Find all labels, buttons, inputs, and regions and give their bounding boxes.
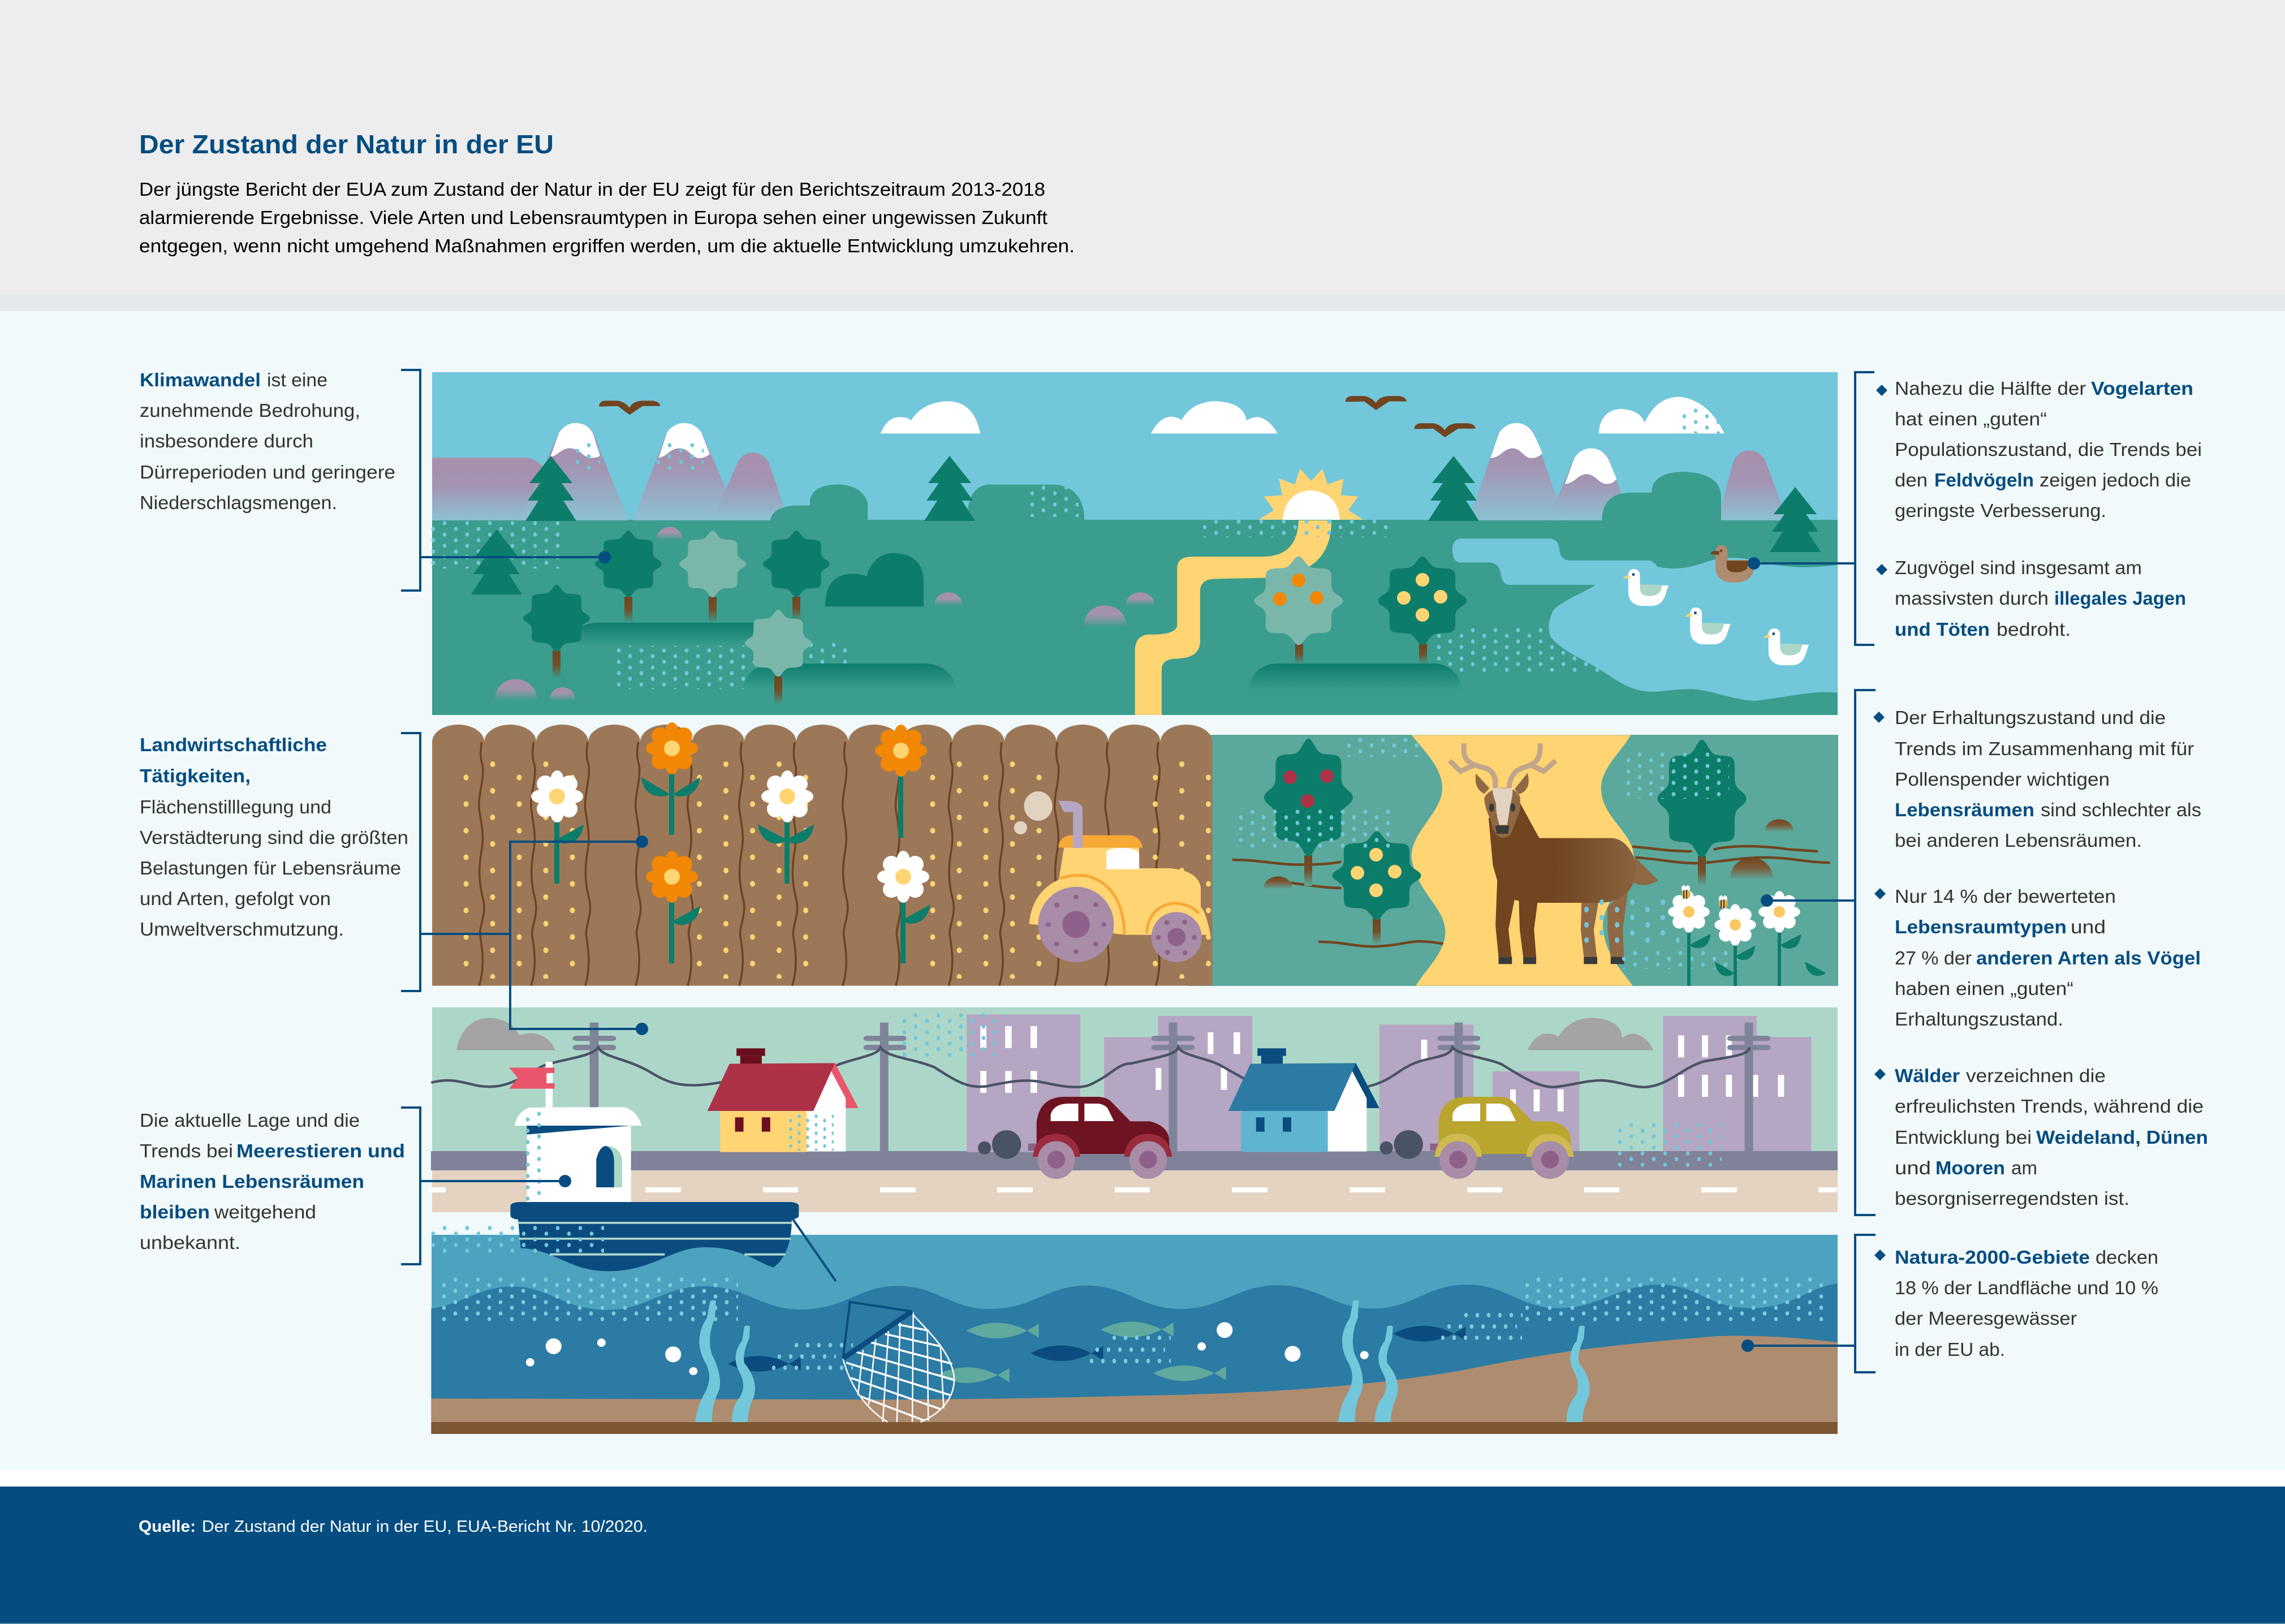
text: Vogelarten bullets: [1876, 378, 2202, 640]
text: Meerestiere: Marinen Lebensräumen: [140, 1171, 364, 1192]
text: Vogelarten bullets: Zugvögel sind insgesamt am: [1895, 557, 2142, 578]
text: Lebensräume bullets: Wälder: [1895, 1065, 1960, 1086]
trees forest: [523, 531, 830, 705]
text: Vogelarten bullets: Feldvögeln: [1934, 469, 2034, 490]
fish trail dots: [771, 1312, 1523, 1371]
text: Klimawandel: Niederschlagsmengen.: [140, 492, 337, 513]
text: Vogelarten bullets: den: [1895, 469, 1928, 490]
connector: right 3: [1741, 1235, 1876, 1372]
text: Lebensräume bullets: sind schlechter als: [2041, 799, 2201, 820]
text: Lebensräume bullets: Entwicklung bei: [1895, 1127, 2032, 1148]
text: Landwirtschaftliche Tätigkeiten: Landwirtschaftliche: [140, 734, 327, 755]
text: Vogelarten bullets: Populationszustand, die Trends bei: [1895, 439, 2202, 460]
text: Meerestiere: [140, 1110, 405, 1253]
icon: daisies and bees: [1668, 885, 1826, 986]
seagrass: [695, 1300, 1590, 1422]
text: Klimawandel: insbesondere durch: [140, 430, 313, 451]
dark water, seabed, dots: [431, 1283, 1838, 1434]
text: Lebensräume bullets: am: [2011, 1157, 2037, 1178]
swans and duck: [1623, 545, 1809, 665]
icon: deer: [1450, 743, 1658, 964]
meadow trees: [1264, 739, 1746, 945]
panel: farmland and meadow: [432, 722, 1838, 986]
footer band: [0, 1487, 2285, 1624]
text: Vogelarten bullets: zeigen jedoch die: [2040, 469, 2191, 490]
water dots: [442, 1277, 1823, 1321]
text: Lebensräume bullets: haben einen „guten“: [1895, 978, 2073, 999]
fruit trees: [1248, 557, 1467, 690]
intro text: Der jüngste Bericht der EUA zum Zustand der Natur in der EU zeigt für den Berichtszeitraum 2013-2018: [139, 179, 1045, 200]
intro text: alarmierende Ergebnisse. Viele Arten und Lebensraumtypen in Europa sehen einer ungewissen Zukunft: [139, 207, 1047, 228]
text: Lebensräume bullets: und: [1895, 1157, 1931, 1178]
text: Natura 2000: Natura-2000-Gebiete: [1895, 1247, 2090, 1268]
text: Vogelarten bullets: massivsten durch: [1895, 588, 2049, 609]
text: Klimawandel: Dürreperioden und geringere: [140, 462, 395, 483]
buildings: [967, 1014, 1811, 1152]
text: Vogelarten bullets: bedroht.: [1997, 619, 2071, 640]
text: Natura 2000: [1874, 1247, 2158, 1360]
text: Landwirtschaftliche Tätigkeiten: und Arten, gefolgt von: [140, 888, 331, 909]
text: Vogelarten bullets: und Töten: [1895, 619, 1990, 640]
text: Klimawandel: Klimawandel: [140, 369, 261, 390]
text: Lebensräume bullets: [1873, 707, 2208, 1209]
text: Lebensräume bullets: Trends im Zusammenhang mit für: [1895, 738, 2194, 759]
text: Vogelarten bullets: Vogelarten: [2091, 378, 2193, 399]
text: Lebensräume bullets: erfreulichsten Trends, während die: [1895, 1096, 2204, 1117]
text: Meerestiere: weitgehend: [214, 1201, 316, 1222]
cloud and path dots: [1202, 408, 1724, 537]
bubbles: [526, 1322, 1369, 1375]
text: Lebensräume bullets: Der Erhaltungszustand und die: [1895, 707, 2166, 728]
red car: [978, 1097, 1172, 1179]
text: Lebensräume bullets: Erhaltungszustand.: [1895, 1009, 2063, 1029]
text: Meerestiere: unbekannt.: [140, 1232, 240, 1253]
text: Landwirtschaftliche Tätigkeiten: Tätigkeiten,: [140, 765, 251, 786]
text: Landwirtschaftliche Tätigkeiten: [140, 734, 408, 940]
intro text: entgegen, wenn nicht umgehend Maßnahmen ergriffen werden, um die aktuelle Entwicklung umzukehren.: [139, 235, 1075, 256]
text: Natura 2000: decken: [2096, 1247, 2158, 1268]
source text: Quelle:: [139, 1518, 196, 1536]
text: Natura 2000: 18 % der Landfläche und 10 %: [1895, 1277, 2158, 1298]
flower stems and leaves: [531, 722, 930, 963]
utility poles and wires: [431, 1023, 1770, 1152]
road dashes: [428, 1187, 1837, 1192]
panel: town and road: [428, 1007, 1838, 1212]
furrows: [479, 742, 1161, 986]
farmland field: [432, 725, 1213, 986]
meadow path, lines and mounds: [1232, 735, 1830, 986]
text: Lebensräume bullets: anderen Arten als Vögel: [1976, 947, 2201, 968]
seeds: [441, 758, 1212, 979]
clouds: [456, 1018, 1653, 1050]
pines: [471, 456, 1821, 595]
ground mounds and hills: [494, 527, 1526, 827]
text: Vogelarten bullets: illegales Jagen: [2054, 588, 2186, 609]
pattern dots on landscape: [431, 443, 1601, 689]
connector: left 2: [401, 733, 648, 1035]
text: Lebensräume bullets: und: [2071, 916, 2106, 937]
sky elements right: [1135, 396, 1838, 715]
text: Meerestiere: Meerestieren und: [236, 1140, 405, 1161]
fish: [728, 1321, 1465, 1383]
text: Lebensräume bullets: Weideland, Dünen: [2036, 1127, 2208, 1148]
connector: left 3: [401, 1108, 571, 1264]
text: Klimawandel: zunehmende Bedrohung,: [140, 400, 360, 421]
text: Landwirtschaftliche Tätigkeiten: Umweltverschmutzung.: [140, 919, 344, 940]
yellow car: [1380, 1097, 1574, 1179]
text: Natura 2000: der Meeresgewässer: [1895, 1308, 2077, 1329]
text: Lebensräume bullets: 27 % der: [1895, 947, 1972, 968]
text: Lebensräume bullets: Mooren: [1935, 1157, 2005, 1178]
text: Meerestiere: Trends bei: [140, 1140, 233, 1161]
text: Lebensräume bullets: bei anderen Lebensräumen.: [1895, 830, 2142, 851]
text: Natura 2000: in der EU ab.: [1895, 1339, 2005, 1360]
text: Lebensräume bullets: Lebensraumtypen: [1895, 916, 2067, 937]
boat dots: [431, 1112, 604, 1254]
building windows: [980, 1026, 1784, 1112]
text: Landwirtschaftliche Tätigkeiten: Verstädterung sind die größten: [140, 827, 408, 848]
meadow dots: [1239, 738, 1741, 969]
text: Meerestiere: bleiben: [140, 1201, 210, 1222]
footer gap: [0, 1470, 2285, 1487]
text: Vogelarten bullets: hat einen „guten“: [1895, 408, 2047, 429]
text: Lebensräume bullets: Nur 14 % der bewerteten: [1895, 886, 2116, 907]
source text: Der Zustand der Natur in der EU, EUA-Bericht Nr. 10/2020.: [202, 1518, 648, 1536]
red house: [708, 1048, 859, 1152]
text: Lebensräume bullets: verzeichnen die: [1966, 1065, 2106, 1086]
intro text: [139, 179, 1075, 256]
connector: left 1: [401, 370, 611, 591]
text: Landwirtschaftliche Tätigkeiten: Flächenstilllegung und: [140, 796, 331, 817]
text: Vogelarten bullets: geringste Verbesserung.: [1895, 500, 2106, 521]
text: Klimawandel: ist eine: [267, 369, 327, 390]
connector: right 2: [1761, 690, 1876, 1215]
panel: mountains, forest and lake: [431, 372, 1838, 827]
text: Lebensräume bullets: besorgniserregendsten ist.: [1895, 1188, 2129, 1209]
panel: sea with fishing boat: [431, 1235, 1838, 1434]
title: Der Zustand der Natur in der EU: [139, 130, 554, 159]
mountains and hills left: [432, 400, 1084, 520]
text: Vogelarten bullets: Nahezu die Hälfte der: [1895, 378, 2086, 399]
connector: right 1: [1748, 372, 1874, 645]
blue house: [1228, 1048, 1379, 1152]
text: Klimawandel: [140, 369, 395, 513]
text: Meerestiere: Die aktuelle Lage und die: [140, 1110, 360, 1131]
text: Landwirtschaftliche Tätigkeiten: Belastungen für Lebensräume: [140, 858, 401, 878]
text: Lebensräume bullets: Lebensräumen: [1895, 799, 2034, 820]
town dots: [788, 1013, 1722, 1168]
icon: fishing net: [843, 1302, 954, 1422]
text: Lebensräume bullets: Pollenspender wichtigen: [1895, 769, 2110, 790]
icon: fishing boat: [509, 1062, 836, 1281]
header band: [0, 0, 2285, 311]
icon: tractor: [1014, 791, 1210, 962]
